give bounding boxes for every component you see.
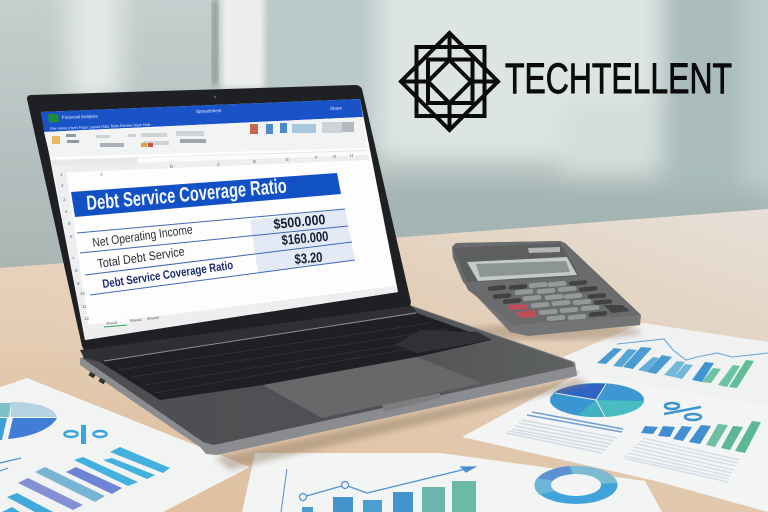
row numbers: 12 [84,316,90,321]
column letters: B [170,164,173,169]
row: total debt service [96,228,329,271]
line chart axis [281,469,287,512]
trend line [617,339,768,360]
keyboard key rows [118,323,478,393]
laptop [27,85,590,470]
title bar labels: File Home Insert Page Layout Data Tools Review View Help [50,123,151,131]
formula bar [51,150,368,166]
column letters: H [350,153,353,158]
column letters: C [217,162,221,167]
title band [71,173,341,217]
laptop base top [82,306,575,445]
keyboard right keys [395,330,492,353]
table rule lines [77,209,355,295]
percent symbol [64,425,106,444]
column letters: G [333,154,337,159]
column letters: F [315,155,318,160]
row: debt service coverage ratio: $3.20 [294,249,323,267]
excel icon [48,114,59,123]
paper: middle pie and percent [462,373,768,512]
pie chart [0,402,57,440]
dark keys [490,282,610,315]
camera [214,96,216,98]
row numbers: 2 [61,183,64,188]
row header [54,172,90,340]
bars [0,447,170,512]
laptop lid [27,85,411,350]
row: net operating income: Net Operating Income [92,222,194,250]
column header [52,155,370,173]
calculator top panel [452,241,641,325]
logo: Techtellent [401,33,732,130]
solar panel [528,247,560,253]
paper: bottom centre [242,453,662,512]
row: net operating income [92,211,326,250]
row numbers: 9 [77,281,80,286]
row: total debt service: Total Debt Service [96,244,186,271]
column letters: E [286,157,289,162]
column letters: A [100,172,103,177]
percent symbol [664,403,701,420]
wooden desk [0,209,768,512]
title text: Debt Service Coverage Ratio [85,175,288,215]
paper: top right bar chart [563,323,768,405]
laptop hinge [80,305,417,362]
column letters: D [253,159,257,164]
column letters [100,153,353,177]
paper: bottom left [0,378,250,512]
red keys [507,304,537,318]
value cells [250,209,355,273]
calculator body [452,241,641,336]
title bar labels: Share [330,105,343,111]
pie chart [550,383,644,417]
screen [41,99,398,340]
light keys [517,283,597,319]
row: total debt service: $160.000 [281,228,329,248]
pie legend lines [506,412,623,453]
sheet tabs: Sheet3 [147,316,159,321]
sheet tabs: Sheet1 [106,321,118,326]
status bar [85,286,398,340]
row numbers: 1 [60,172,63,177]
trend arrow [300,467,475,500]
ports [88,372,106,384]
row numbers: 3 [63,197,66,202]
front notch [382,393,440,412]
large dark key [604,305,630,313]
row: net operating income: $500.000 [273,211,326,232]
sheet tabs [103,316,159,327]
percent legend lines [623,438,740,482]
percent bar chart [641,421,761,453]
sheet tabs: Sheet2 [130,318,142,323]
row numbers: 6 [70,234,73,239]
display [467,257,577,281]
blurred office background [0,0,768,280]
row numbers: 4 [65,209,68,214]
laptop base edge [80,305,577,455]
keyboard [100,313,492,400]
laptop shadow [215,378,590,470]
row numbers: 8 [75,268,78,273]
ribbon tools [52,122,354,147]
row numbers: 10 [80,291,86,296]
calculator [452,241,642,340]
row numbers [60,172,90,321]
row numbers: 5 [68,221,71,226]
title bar labels [50,105,343,131]
row numbers: 11 [82,304,87,309]
row: debt service coverage ratio [101,249,323,291]
row numbers: 7 [72,256,75,261]
donut chart [534,466,618,504]
bars [597,347,754,388]
title bar [41,99,363,132]
row: debt service coverage ratio: Debt Service Coverage Ratio [101,258,234,291]
bars [302,481,476,512]
trackpad [263,357,482,418]
logo mark [401,33,498,130]
title bar labels: Spreadsheet [196,108,222,114]
ribbon [44,117,367,157]
title bar labels: Financial Analysis [62,113,99,120]
